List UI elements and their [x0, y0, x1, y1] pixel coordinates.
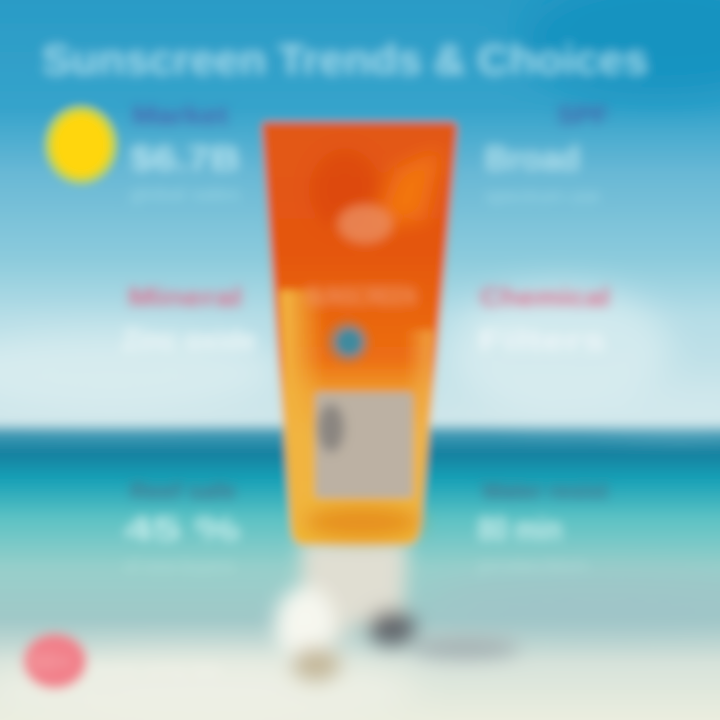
tube info label: [315, 392, 413, 498]
stat block: middle right: Chemical: [480, 282, 610, 312]
stat block: lower right: protection: [478, 556, 588, 576]
stat block: lower right: Water resist: [482, 478, 608, 505]
tube cap and foot: [275, 540, 520, 681]
stat block: lower left: of new buyers: [124, 556, 234, 576]
stat block: lower left: [124, 478, 240, 576]
stat block: middle right: Filters: [478, 324, 606, 357]
stat block: top left: [130, 100, 240, 204]
footnote: Source: survey data: [90, 660, 221, 680]
stat block: middle right: [478, 282, 610, 357]
stat block: top left: $6.7B: [130, 140, 240, 178]
tube product name: SUNSCREEN: [306, 281, 416, 311]
stat block: top right: spectrum use: [485, 186, 600, 206]
stat block: lower left: 45 %: [124, 511, 240, 547]
badge: pink stamp: 50+: [30, 649, 71, 676]
stat block: top left: global sales: [130, 184, 240, 204]
sunscreen tube: [262, 122, 520, 681]
badge: pink stamp: [24, 634, 86, 688]
icon: sun: [45, 106, 117, 184]
title: Sunscreen Trends & Choices: [42, 36, 648, 83]
tube logo: [337, 204, 393, 244]
stat block: top right: [485, 100, 609, 206]
stat block: top right: Broad: [485, 140, 580, 178]
tube highlights: [304, 150, 440, 537]
stat block: top right: SPF: [557, 100, 609, 130]
stat block: middle left: [122, 282, 256, 357]
stat block: lower right: 80 min: [478, 511, 562, 547]
stat block: middle left: Zinc oxide: [122, 324, 256, 357]
tube SPF badge: [327, 321, 369, 363]
stat block: lower right: [478, 478, 608, 576]
stat block: middle left: Mineral: [128, 282, 242, 312]
stat block: top left: Market: [132, 100, 228, 130]
tube side shading: [279, 290, 434, 525]
tube body: [262, 122, 457, 545]
stat block: lower left: Reef safe: [130, 478, 236, 505]
